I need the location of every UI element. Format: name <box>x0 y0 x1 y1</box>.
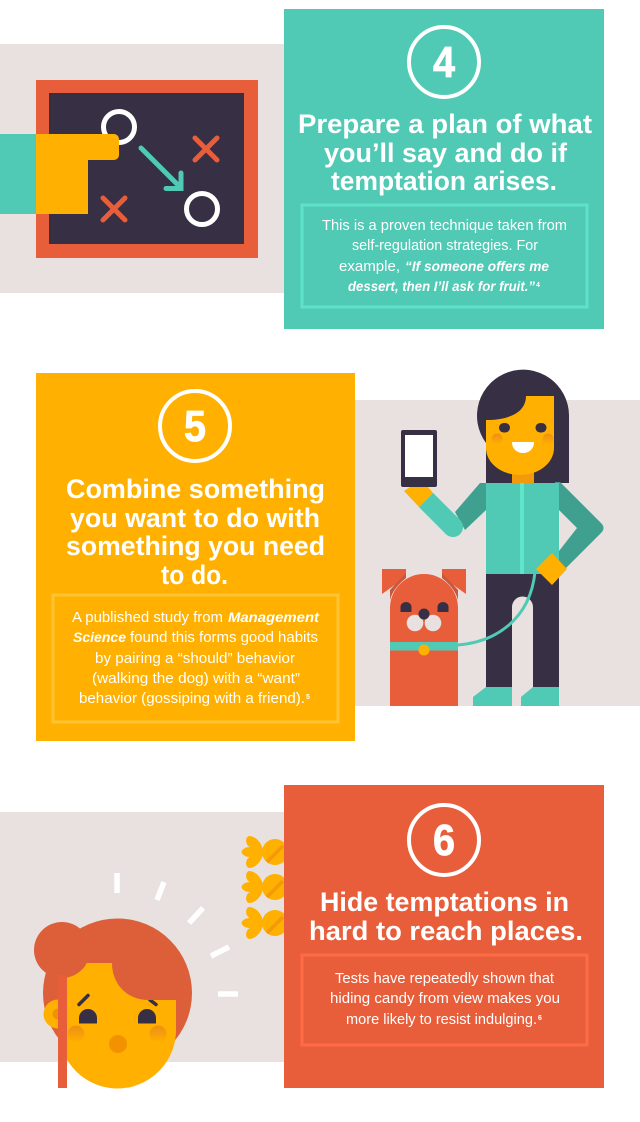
body <box>390 574 458 706</box>
cheeks <box>68 1026 166 1042</box>
raised hand <box>404 487 433 507</box>
icon: candies <box>242 836 288 939</box>
board frame <box>36 80 258 258</box>
text box <box>53 595 338 722</box>
text box: Science <box>73 629 126 645</box>
candy 1 <box>242 836 288 868</box>
text box: (walking the dog) with a “want” <box>92 671 300 687</box>
text box: found this forms good habits <box>130 630 318 646</box>
heading: temptation arises. <box>331 166 557 196</box>
panel: step 4 <box>284 9 604 329</box>
illustration: woman with phone <box>401 370 604 706</box>
text box: “If someone offers me <box>405 258 549 274</box>
face <box>486 396 554 475</box>
text box: A published study from <box>72 610 223 626</box>
arrow <box>141 148 181 188</box>
number badge 6 <box>409 805 479 875</box>
text box: Tests have repeatedly shown that <box>335 971 554 987</box>
board surface <box>49 93 244 244</box>
text box: 6 <box>538 1015 542 1022</box>
text box: behavior (gossiping with a friend). <box>79 691 305 707</box>
muzzle <box>407 615 441 631</box>
heading: to do. <box>161 560 228 590</box>
torso <box>486 483 559 574</box>
number badge 4 <box>409 27 479 97</box>
leash <box>458 572 535 645</box>
circle marker start <box>104 112 134 142</box>
eyes <box>499 423 546 432</box>
ears <box>382 569 466 594</box>
text box: example, <box>339 259 400 275</box>
pants <box>486 574 559 687</box>
text box: Management <box>228 609 320 625</box>
eyebrows <box>79 996 156 1004</box>
bun <box>34 922 90 978</box>
text box: 4 <box>536 282 540 289</box>
heading: something you need <box>66 531 325 561</box>
number badge 5 <box>160 391 230 461</box>
heading: Prepare a plan of what <box>298 109 592 139</box>
forearm <box>426 500 453 527</box>
sleeve <box>0 134 36 214</box>
heading <box>298 109 592 196</box>
tag <box>418 644 430 656</box>
illustration: dog <box>382 569 466 706</box>
text box <box>302 205 587 307</box>
far arm <box>552 482 604 572</box>
heading: you want to do with <box>70 503 320 533</box>
dog eyes <box>400 602 448 612</box>
face <box>67 963 176 1088</box>
hair <box>43 918 192 1068</box>
eyes <box>79 1009 156 1024</box>
text box: by pairing a “should” behavior <box>95 651 295 667</box>
text box <box>302 955 587 1045</box>
candy 2 <box>242 871 288 903</box>
lower hand <box>536 553 567 585</box>
bangs <box>112 955 176 1000</box>
pointing hand <box>36 134 119 214</box>
cross marker top <box>195 138 217 160</box>
hair <box>477 370 569 483</box>
circle marker end <box>186 194 218 224</box>
mouth <box>109 1035 127 1053</box>
text box: 5 <box>306 694 310 701</box>
heading: Hide temptations in <box>320 887 569 917</box>
panel: step 5 <box>36 373 355 741</box>
text box: self-regulation strategies. For <box>352 238 538 254</box>
shoes <box>473 687 559 706</box>
cheeks <box>492 434 554 442</box>
text box: dessert, then I’ll ask for fruit.” <box>348 278 535 294</box>
ear <box>44 1000 72 1028</box>
heading <box>309 887 583 946</box>
candy 3 <box>242 907 288 939</box>
number badge 5: 5 <box>184 401 206 450</box>
illustration: strategy board with pointing hand <box>0 80 258 258</box>
heading: Combine something <box>66 474 325 504</box>
heading: you’ll say and do if <box>324 138 568 168</box>
heading <box>66 474 325 590</box>
phone <box>401 430 437 487</box>
text box: hiding candy from view makes you <box>330 991 560 1007</box>
nose <box>418 608 430 620</box>
section 5 background band <box>355 400 640 706</box>
zipper <box>520 483 524 574</box>
raised upper arm <box>455 483 486 530</box>
number badge 4: 4 <box>433 37 456 86</box>
panel: step 6 <box>284 785 604 1088</box>
heading: hard to reach places. <box>309 916 583 946</box>
neck <box>512 470 534 484</box>
ear folds <box>390 573 458 600</box>
cross marker bottom <box>103 198 125 220</box>
section 6 background band <box>0 812 284 1062</box>
hair strand <box>58 975 67 1088</box>
illustration: worried woman <box>34 873 238 1088</box>
number badge 6: 6 <box>433 815 455 864</box>
text box: This is a proven technique taken from <box>322 218 567 234</box>
collar <box>390 642 458 650</box>
smile <box>512 442 534 453</box>
section 4 background band <box>0 44 284 293</box>
alert rays <box>117 873 238 994</box>
text box: more likely to resist indulging. <box>346 1012 537 1028</box>
